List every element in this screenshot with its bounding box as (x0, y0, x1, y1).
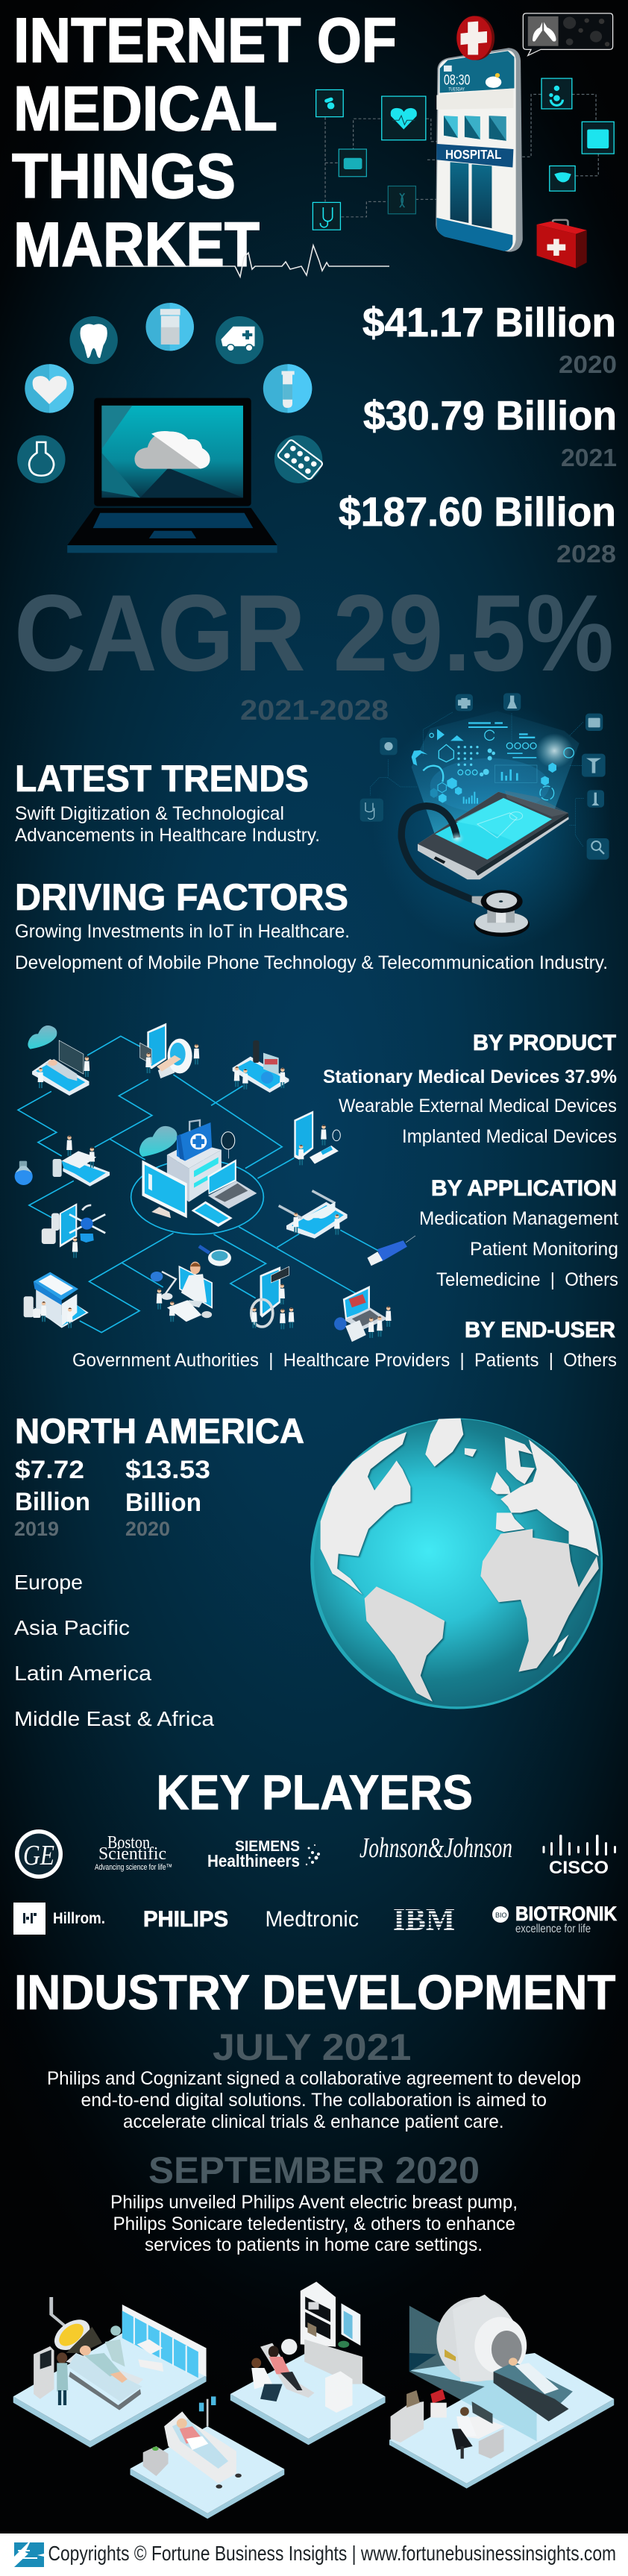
hospital phone illustration: TUESDAY (448, 87, 465, 92)
title: MEDICAL (13, 73, 277, 143)
hologram (412, 711, 580, 835)
development september 2020: Philips unveiled Philips Avent electric breast pump, (110, 2192, 518, 2213)
by product: Stationary Medical Devices 37.9% (323, 1066, 617, 1087)
driving factors (15, 876, 608, 973)
floating icons (360, 693, 609, 860)
logo: biotronik: BIOTRONIK (515, 1903, 617, 1925)
key players heading: KEY PLAYERS (157, 1765, 473, 1820)
regions list (14, 1571, 214, 1730)
flask (15, 1161, 33, 1185)
market value 2020 (362, 299, 617, 378)
scene: laptop samples (334, 1286, 392, 1342)
footer bar (0, 2533, 628, 2576)
cagr: 2021-2028 (240, 695, 389, 726)
market value 2021: $30.79 Billion (363, 392, 617, 439)
market value 2021: 2021 (561, 444, 617, 471)
by end user: Government Authorities | Healthcare Providers | Patients | Others (72, 1350, 617, 1371)
logo: hillrom: Hillrom. (53, 1910, 105, 1927)
cyan tech icons (313, 78, 614, 230)
regions list: Europe (14, 1571, 83, 1594)
scene: smart glasses (279, 1191, 348, 1239)
development july 2021 (47, 2026, 581, 2132)
ambulance icon (221, 327, 255, 346)
by product: BY PRODUCT (473, 1031, 616, 1055)
latest trends (15, 758, 320, 846)
logo: boston scientific: Advancing science for life™ (95, 1863, 172, 1872)
regions list: Middle East & Africa (14, 1707, 214, 1730)
north america: 2020 (125, 1518, 170, 1540)
room: dental clinic (230, 2281, 386, 2445)
stethoscope (401, 806, 474, 900)
logo: cisco (543, 1835, 616, 1878)
development september 2020: SEPTEMBER 2020 (148, 2149, 480, 2191)
heart icon (33, 376, 66, 404)
scene: laboratory (233, 1040, 289, 1093)
north america: Billion (15, 1488, 90, 1516)
logo: biotronik (492, 1903, 617, 1935)
latest trends: Advancements in Healthcare Industry. (15, 825, 320, 846)
phone body (436, 48, 523, 252)
logo: siemens healthineers: Healthineers (207, 1851, 300, 1870)
by product (323, 1031, 617, 1147)
first aid kit (537, 220, 587, 268)
logo: medtronic: Medtronic (266, 1907, 359, 1932)
scene: mri phone (140, 1023, 199, 1078)
scene: phone wearable (251, 1266, 294, 1329)
hospital phone illustration: HOSPITAL (445, 148, 501, 162)
development july 2021: accelerate clinical trials & enhance patient care. (123, 2111, 504, 2132)
title: MARKET (13, 210, 260, 280)
driving factors: Growing Investments in IoT in Healthcare. (15, 921, 350, 942)
north america (14, 1411, 304, 1540)
scene: drone phone (42, 1203, 105, 1258)
hospital phone illustration (313, 13, 614, 268)
logo: biotronik: excellence for life (515, 1923, 591, 1935)
scene: doctor video call (151, 1246, 231, 1322)
logo: boston scientific: Scientific (98, 1844, 166, 1864)
scene: pharmacy shop (24, 1272, 89, 1328)
market value 2028: 2028 (556, 540, 616, 568)
market value 2020: 2020 (559, 351, 617, 378)
footer logo (14, 2542, 44, 2567)
cloud (134, 432, 210, 469)
central hospital (139, 1120, 257, 1227)
hospital phone illustration: 08:30 (444, 72, 470, 88)
test tube icon (282, 371, 295, 408)
regions list: Asia Pacific (14, 1616, 130, 1639)
by application: Telemedicine | Others (436, 1269, 618, 1290)
phone (418, 792, 569, 879)
logo: siemens healthineers: SIEMENS (235, 1838, 300, 1855)
logo: philips: PHILIPS (143, 1907, 228, 1932)
north america: Billion (125, 1489, 201, 1517)
market value 2028: $187.60 Billion (339, 489, 616, 535)
latest trends: Swift Digitization & Technological (15, 803, 284, 824)
development september 2020: services to patients in home care settings. (145, 2234, 483, 2255)
smartphone stethoscope illustration (360, 693, 612, 949)
by product: Implanted Medical Devices (402, 1126, 617, 1147)
driving factors: Development of Mobile Phone Technology & Telecommunication Industry. (15, 952, 608, 973)
logo: cisco: CISCO (549, 1858, 609, 1878)
speech bubble (523, 13, 613, 55)
by application: Medication Management (419, 1208, 618, 1229)
room: operating theatre (13, 2297, 207, 2448)
logo: siemens healthineers (207, 1838, 320, 1870)
flask icon (29, 442, 54, 476)
development july 2021: end-to-end digital solutions. The collaboration is aimed to (81, 2090, 547, 2111)
laptop (94, 398, 251, 506)
hospital rooms illustration (13, 2281, 614, 2519)
logo: boston scientific (95, 1833, 172, 1872)
north america: $7.72 (15, 1456, 84, 1484)
scene: desk consultation (53, 1136, 110, 1187)
north america: NORTH AMERICA (15, 1411, 304, 1451)
north america: 2019 (14, 1518, 59, 1540)
logo: biotronik: BIO (495, 1911, 507, 1919)
logo: ge: GE (23, 1840, 54, 1871)
by application: Patient Monitoring (470, 1239, 618, 1260)
logo: hillrom (13, 1903, 105, 1935)
red cross badge (456, 16, 494, 60)
by application (419, 1176, 618, 1290)
ecg line (112, 245, 389, 277)
development september 2020 (110, 2149, 518, 2255)
market value 2020: $41.17 Billion (362, 299, 616, 345)
logo: johnson and johnson: Johnson&Johnson (359, 1832, 512, 1864)
bottle icon (160, 309, 180, 345)
market value 2021 (363, 392, 617, 471)
title (12, 5, 397, 280)
development july 2021: Philips and Cognizant signed a collaborative agreement to develop (47, 2068, 581, 2089)
regions list: Latin America (14, 1662, 151, 1685)
logo: boston scientific: Boston (107, 1833, 150, 1853)
title: INTERNET OF (13, 5, 397, 75)
driving factors: DRIVING FACTORS (15, 876, 348, 918)
tooth icon (81, 324, 107, 358)
globe (310, 1419, 603, 1709)
market value 2028 (339, 489, 616, 568)
room: mri scanner (389, 2295, 614, 2489)
development july 2021: JULY 2021 (213, 2026, 412, 2068)
by end user: BY END-USER (465, 1318, 615, 1342)
logo: ibm: IBM (393, 1903, 455, 1938)
laptop cloud illustration (17, 303, 324, 553)
scene: mobile with glucometer (294, 1110, 340, 1165)
north america: $13.53 (125, 1456, 210, 1484)
development september 2020: Philips Sonicare teledentistry, & others to enhance (113, 2214, 515, 2234)
pills icon (277, 439, 324, 480)
logo: ge (15, 1829, 63, 1879)
isometric iot network (15, 1023, 415, 1342)
by product: Wearable External Medical Devices (339, 1096, 617, 1116)
latest trends: LATEST TRENDS (15, 758, 309, 799)
syringe (367, 1236, 415, 1266)
by application: BY APPLICATION (431, 1176, 617, 1201)
title: THINGS (12, 141, 236, 211)
by end user (72, 1318, 617, 1371)
scene: patient bed (28, 1025, 90, 1096)
room: patient ward (131, 2396, 284, 2519)
